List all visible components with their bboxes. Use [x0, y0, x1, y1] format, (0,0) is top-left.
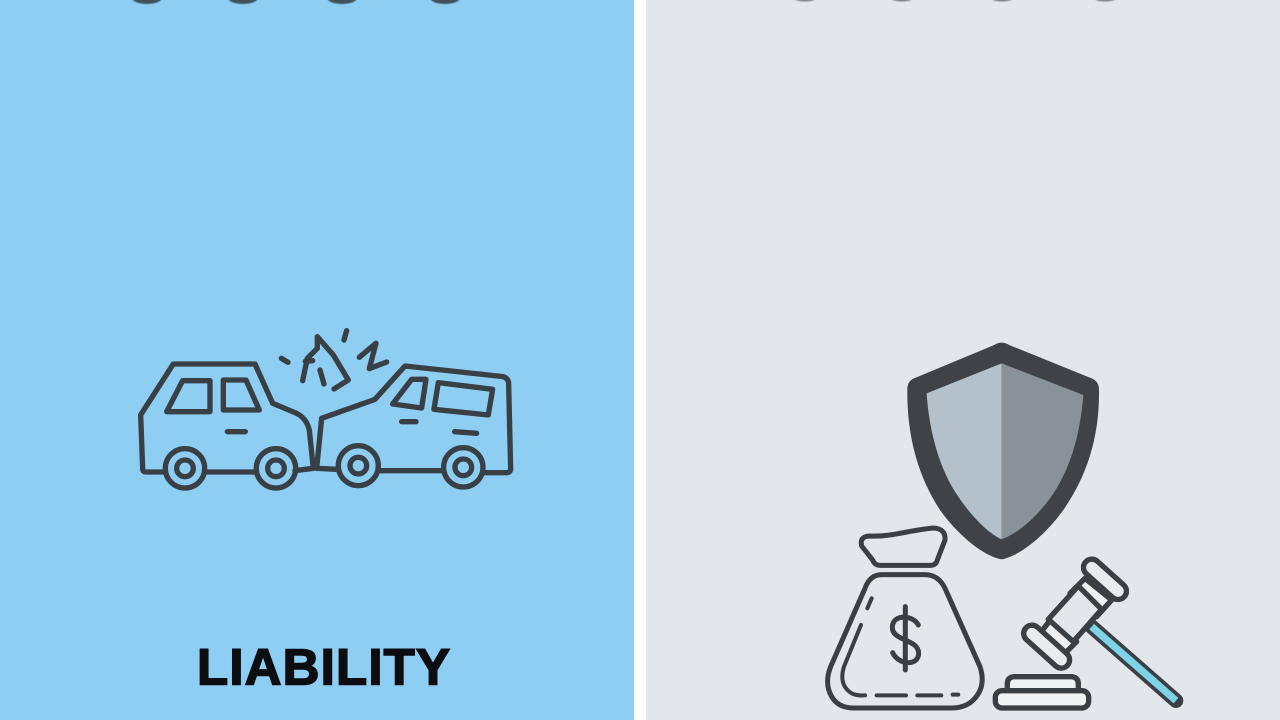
right car body	[317, 366, 511, 473]
impact sparks	[303, 337, 348, 389]
gavel necks	[1070, 578, 1112, 617]
panel: liability	[0, 0, 634, 720]
panel: protection	[646, 0, 1280, 720]
icon: car collision	[141, 331, 511, 488]
icon: gavel	[995, 556, 1176, 708]
left car wheels	[165, 449, 205, 488]
gavel caps	[1080, 556, 1130, 603]
left car body	[141, 364, 313, 472]
dollar sign	[892, 607, 919, 670]
bag tie	[861, 528, 945, 565]
gavel head	[1048, 586, 1102, 642]
bag highlights	[842, 598, 958, 695]
icon: money bag	[828, 528, 982, 708]
binder holes: right panel	[795, 0, 1115, 2]
gavel block	[1007, 677, 1078, 691]
binder holes: left panel	[132, 0, 460, 4]
right car wheels	[338, 446, 378, 486]
bag body	[828, 575, 982, 708]
icon: shield	[907, 343, 1099, 559]
heading: liability: LIABILITY	[197, 638, 450, 696]
gavel handle	[1092, 627, 1176, 701]
